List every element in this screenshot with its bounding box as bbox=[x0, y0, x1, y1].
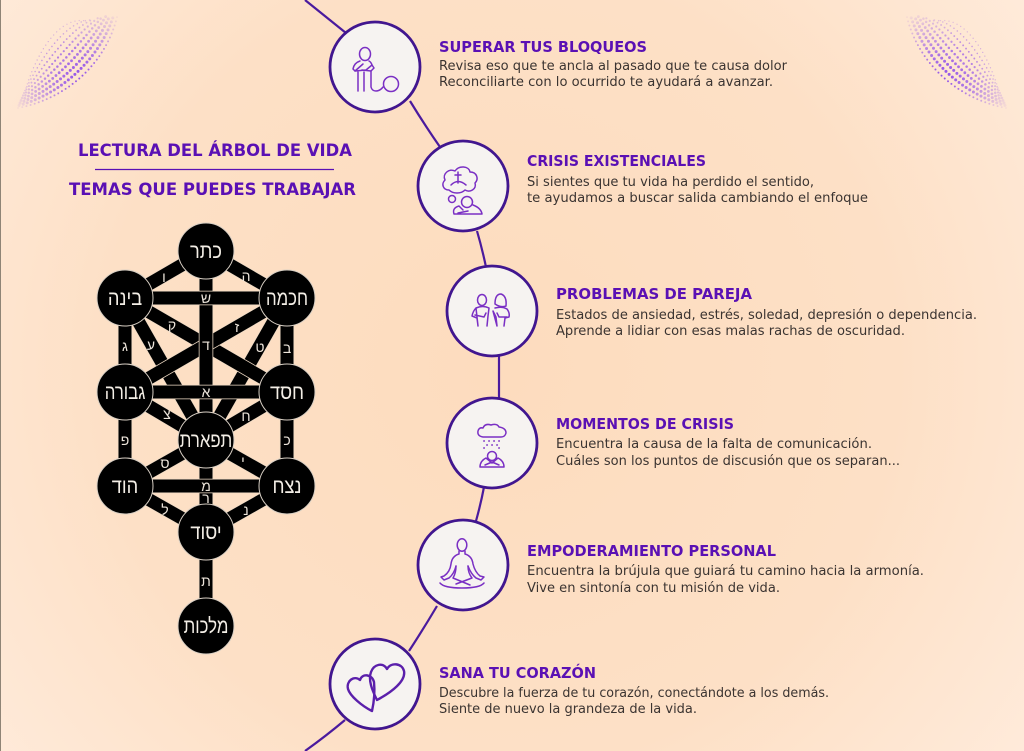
timeline connector bbox=[305, 0, 499, 751]
path letters: ג bbox=[122, 338, 128, 354]
heading: PROBLEMAS DE PAREJA bbox=[556, 285, 752, 303]
item: momentos de crisis bbox=[447, 398, 900, 488]
description: Estados de ansiedad, estrés, soledad, depresión o dependencia. bbox=[556, 308, 977, 323]
heading: SUPERAR TUS BLOQUEOS bbox=[439, 38, 647, 56]
path letters: כ bbox=[283, 432, 291, 448]
path letters: ר bbox=[202, 490, 210, 506]
description bbox=[439, 686, 829, 717]
sephirot names: כתר bbox=[190, 240, 222, 263]
heading: MOMENTOS DE CRISIS bbox=[556, 415, 734, 433]
description bbox=[527, 564, 924, 596]
item: empoderamiento personal bbox=[418, 520, 924, 610]
circle badge bbox=[418, 520, 508, 610]
sephirot names: חכמה bbox=[266, 287, 308, 311]
icon: couple back to back bbox=[472, 294, 509, 326]
heading: EMPODERAMIENTO PERSONAL bbox=[527, 542, 776, 560]
path letters: ה bbox=[242, 268, 250, 284]
path letters: ת bbox=[201, 573, 211, 589]
path letters: ק bbox=[168, 317, 176, 333]
description: Siente de nuevo la grandeza de la vida. bbox=[439, 702, 697, 717]
path letters: פ bbox=[121, 432, 129, 448]
halftone swoosh top right bbox=[906, 13, 1006, 108]
path letters: צ bbox=[163, 406, 171, 422]
title block: LECTURA DEL ÁRBOL DE VIDA bbox=[78, 141, 352, 160]
sephirot names: מלכות bbox=[184, 615, 228, 639]
halftone swoosh top left bbox=[18, 13, 118, 108]
description: Si sientes que tu vida ha perdido el sentido, bbox=[527, 175, 814, 190]
description bbox=[556, 308, 977, 339]
path letters: מ bbox=[201, 478, 211, 494]
description: Descubre la fuerza de tu corazón, conectándote a los demás. bbox=[439, 686, 829, 701]
description bbox=[556, 437, 900, 469]
path letters: ח bbox=[241, 408, 251, 424]
path letters: ס bbox=[160, 455, 170, 471]
path letters: ד bbox=[202, 337, 210, 353]
circle badge bbox=[330, 22, 420, 112]
title block: TEMAS QUE PUEDES TRABAJAR bbox=[69, 180, 356, 199]
description bbox=[439, 59, 788, 90]
sephirot names: בינה bbox=[108, 287, 142, 310]
title block bbox=[69, 141, 356, 199]
sephirot names: יסוד bbox=[190, 521, 222, 544]
circle badge bbox=[330, 639, 420, 729]
icon: rain cloud over person bbox=[478, 424, 506, 467]
item: superar tus bloqueos bbox=[330, 22, 788, 112]
paths of the tree bbox=[125, 251, 287, 626]
path letters: נ bbox=[243, 502, 249, 518]
path letters: ו bbox=[162, 269, 166, 285]
heading: SANA TU CORAZÓN bbox=[439, 663, 596, 682]
path letters: ט bbox=[255, 339, 265, 355]
sephirot names: הוד bbox=[112, 475, 138, 498]
path letters: ב bbox=[283, 340, 291, 356]
description: Aprende a lidiar con esas malas rachas de oscuridad. bbox=[556, 324, 905, 339]
item: crisis existenciales bbox=[418, 141, 868, 231]
description: Vive en sintonía con tu misión de vida. bbox=[527, 581, 780, 596]
path letters: י bbox=[241, 453, 245, 469]
description bbox=[527, 175, 868, 206]
circle badge bbox=[418, 141, 508, 231]
description: Cuáles son los puntos de discusión que os separan... bbox=[556, 454, 900, 469]
sephirot names: תפארת bbox=[180, 429, 232, 453]
description: te ayudamos a buscar salida cambiando el enfoque bbox=[527, 191, 868, 206]
icon: thought cloud with grave and bowed person bbox=[443, 167, 482, 214]
description: Encuentra la brújula que guiará tu camino hacia la armonía. bbox=[527, 564, 924, 579]
path letters: ז bbox=[235, 319, 240, 335]
path letters: ע bbox=[147, 337, 155, 353]
item: sana tu corazón bbox=[330, 639, 829, 729]
description: Encuentra la causa de la falta de comunicación. bbox=[556, 437, 872, 452]
sephirot nodes bbox=[97, 223, 315, 654]
sephirot names: חסד bbox=[270, 381, 304, 404]
description: Revisa eso que te ancla al pasado que te causa dolor bbox=[439, 59, 788, 74]
icon: two hearts bbox=[348, 664, 404, 711]
path letters: א bbox=[202, 384, 211, 400]
heading: CRISIS EXISTENCIALES bbox=[527, 152, 706, 170]
description: Reconciliarte con lo ocurrido te ayudará a avanzar. bbox=[439, 75, 773, 90]
tree of life diagram bbox=[97, 223, 315, 654]
path letters bbox=[121, 268, 291, 589]
icon: prisoner with ball and chain bbox=[353, 48, 398, 92]
icon: meditating figure bbox=[440, 539, 484, 588]
sephirot names bbox=[105, 240, 308, 639]
path letters: ש bbox=[201, 290, 211, 306]
item: problemas de pareja bbox=[447, 266, 977, 356]
circle badge bbox=[447, 266, 537, 356]
circle badge bbox=[447, 398, 537, 488]
sephirot names: גבורה bbox=[105, 381, 145, 405]
path letters: ל bbox=[161, 502, 169, 518]
sephirot names: נצח bbox=[272, 475, 302, 498]
